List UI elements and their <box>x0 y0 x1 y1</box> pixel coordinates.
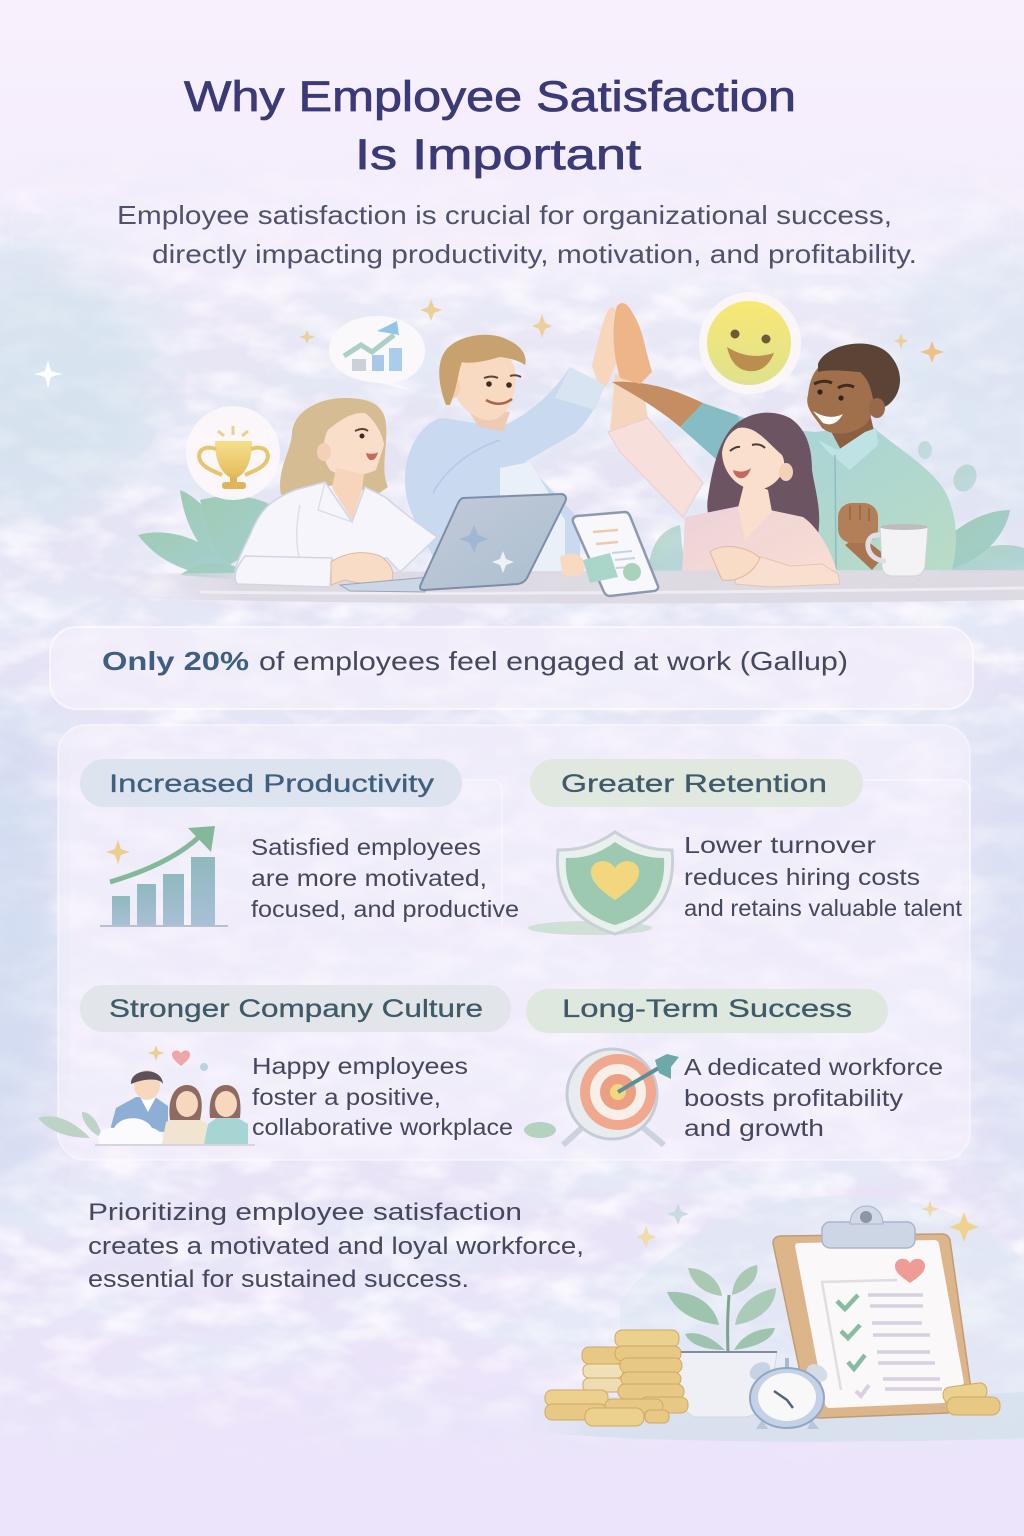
title <box>184 73 796 179</box>
card: long-term success <box>524 989 943 1145</box>
hero illustration: team high five <box>34 292 1024 604</box>
closing text: essential for sustained success. <box>88 1266 469 1293</box>
text: and growth <box>684 1115 824 1141</box>
person: woman left <box>235 398 437 587</box>
title: Why Employee Satisfaction <box>184 73 796 121</box>
intro text: directly impacting productivity, motivation, and profitability. <box>152 239 917 269</box>
icon: target and arrow <box>524 1049 679 1145</box>
icon: team and cloud <box>38 1045 255 1145</box>
text <box>684 1054 943 1141</box>
plants <box>138 441 1024 580</box>
laptop <box>340 494 566 592</box>
text <box>252 1053 513 1140</box>
text: and retains valuable talent <box>684 895 963 921</box>
ground <box>530 1392 1024 1442</box>
person: man right <box>680 344 956 572</box>
text: collaborative workplace <box>252 1114 513 1140</box>
text <box>251 834 519 922</box>
illustration: clipboard, plant, coins, clock <box>530 1200 1024 1442</box>
callout: 20% stat <box>50 627 973 709</box>
coins <box>545 1330 1000 1426</box>
heading pill <box>530 759 863 807</box>
heading pill: Stronger Company Culture <box>109 995 483 1023</box>
panel: benefits <box>38 725 970 1160</box>
heading pill: Long-Term Success <box>562 995 852 1023</box>
text: are more motivated, <box>251 865 487 891</box>
text <box>684 832 963 921</box>
icon: growth chart <box>100 826 228 926</box>
text: Happy employees <box>252 1053 468 1079</box>
card: greater retention <box>528 759 963 935</box>
heading pill <box>526 989 888 1033</box>
hands high five <box>592 303 703 427</box>
card: stronger company culture <box>38 985 513 1145</box>
heading pill: Increased Productivity <box>109 770 435 798</box>
text: focused, and productive <box>251 896 519 922</box>
closing text: creates a motivated and loyal workforce, <box>88 1233 584 1260</box>
text: boosts profitability <box>684 1085 904 1111</box>
heading pill <box>80 759 462 807</box>
text: Satisfied employees <box>251 834 481 860</box>
heading pill: Greater Retention <box>561 770 827 798</box>
sparkles <box>34 299 944 388</box>
card: increased productivity <box>80 759 519 926</box>
intro text: Employee satisfaction is crucial for organizational success, <box>117 200 892 230</box>
intro text <box>117 200 917 269</box>
text: foster a positive, <box>252 1084 441 1110</box>
person: man centre <box>405 335 605 575</box>
mug <box>868 524 928 576</box>
text: Lower turnover <box>684 832 876 858</box>
plant pot <box>667 1265 777 1417</box>
sparkles <box>636 1200 979 1248</box>
icon: smiley bubble <box>699 292 801 394</box>
callout: 20% stat: of employees feel engaged at work (Gallup) <box>259 646 848 676</box>
text: A dedicated workforce <box>684 1054 943 1080</box>
person: woman right <box>608 372 840 587</box>
closing text: Prioritizing employee satisfaction <box>88 1199 522 1226</box>
clipboard <box>773 1206 970 1418</box>
heading pill <box>80 985 511 1032</box>
tablet <box>560 512 658 596</box>
title: Is Important <box>355 131 641 179</box>
text: reduces hiring costs <box>684 864 920 890</box>
table <box>120 570 1024 604</box>
icon: chart speech bubble <box>329 316 425 391</box>
icon: heart shield <box>528 832 673 935</box>
closing text <box>88 1199 584 1293</box>
alarm clock <box>746 1358 831 1429</box>
forearms resting on table <box>235 546 840 587</box>
icon: trophy bubble <box>186 406 280 500</box>
callout: 20% stat: Only 20% <box>102 646 249 676</box>
